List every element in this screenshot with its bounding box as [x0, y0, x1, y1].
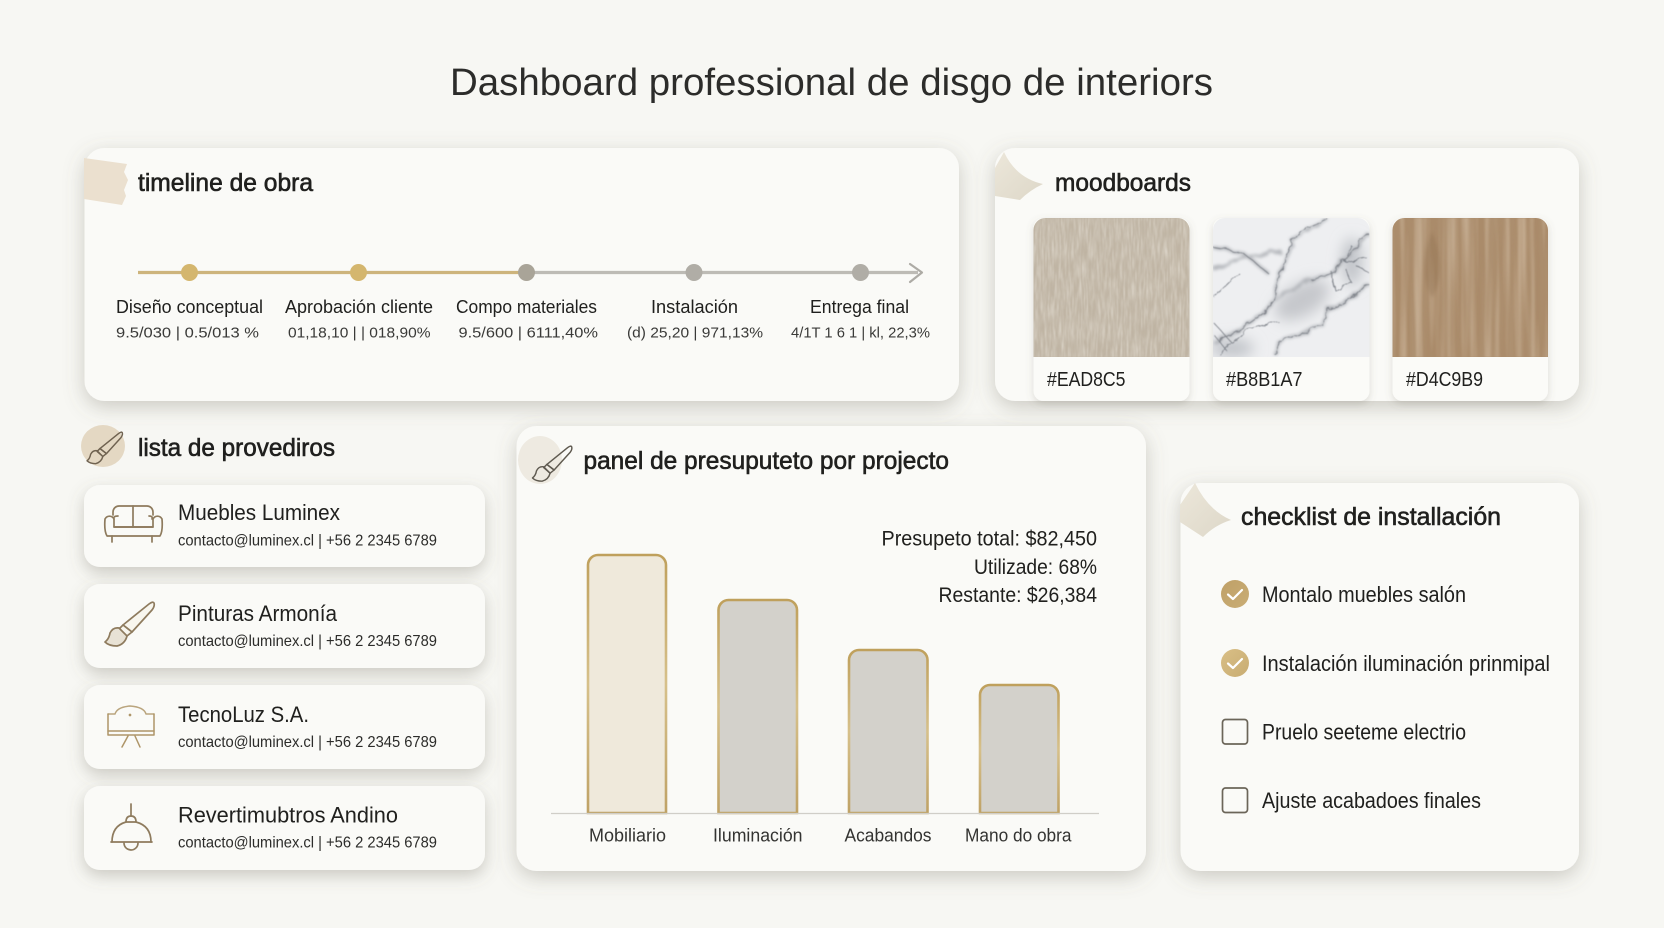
panel: presupuesto por proyecto: [516, 426, 1146, 871]
panel: timeline de obra: [84, 148, 959, 401]
panel: lista de provedores: [81, 425, 485, 870]
supplier name: Revertimubtros Andino: [178, 802, 398, 828]
milestone: Compo materiales: 9.5/600 | 6111,40%: [458, 324, 598, 342]
label: #B8B1A7: [1226, 369, 1302, 391]
milestone: Entrega final: Entrega final: [810, 297, 909, 317]
icon: light fixture: [108, 706, 154, 747]
label: #EAD8C5: [1047, 369, 1126, 391]
heading: checklist de installación: [1241, 503, 1501, 531]
icon: torn paper: [1180, 483, 1231, 537]
card: Pinturas Armonía: [84, 584, 485, 668]
milestone: Diseño conceptual: 9.5/030 | 0.5/013 %: [116, 324, 259, 342]
milestone: Diseño conceptual: [116, 297, 263, 342]
item: done: Instalación iluminación prinmipal: [1262, 651, 1550, 676]
item: done: [1221, 580, 1466, 608]
icon: brush on beige blob: [81, 425, 125, 467]
bar: Iluminación: [718, 600, 797, 813]
arrow head: [910, 264, 922, 282]
icon: sofa: [105, 506, 162, 542]
supplier contact: contacto@luminex.cl | +56 2 2345 6789: [178, 633, 437, 650]
title: Dashboard professional de disgo de interiors: [450, 62, 1213, 104]
icon: paint brush: [105, 602, 154, 646]
supplier name: TecnoLuz S.A.: [178, 702, 309, 727]
milestone: Instalación: Instalación: [651, 297, 738, 317]
supplier contact: contacto@luminex.cl | +56 2 2345 6789: [178, 834, 437, 852]
budget summary: Restante: $26,384: [938, 584, 1097, 607]
swatch: linen: [1034, 218, 1190, 401]
item: pending: Pruelo seeteme electrio: [1262, 720, 1466, 744]
card: Muebles Luminex: [84, 485, 485, 567]
budget summary: [882, 528, 1097, 607]
icon: torn paper: [995, 152, 1043, 200]
heading: lista de provediros: lista de provediros: [138, 434, 335, 462]
timeline track: [138, 264, 922, 282]
heading: timeline de obra: timeline de obra: [138, 169, 313, 197]
supplier contact: contacto@luminex.cl | +56 2 2345 6789: [178, 734, 437, 751]
bar labels: [589, 826, 1072, 846]
bar labels: Mano do obra: [965, 826, 1072, 846]
milestone: Instalación: (d) 25,20 | 971,13%: [627, 324, 763, 342]
supplier name: Muebles Luminex: [178, 500, 340, 525]
milestone: Entrega final: [791, 297, 930, 342]
bar: Mobiliario: [588, 555, 666, 813]
heading: moodboards: moodboards: [1055, 169, 1191, 197]
card: TecnoLuz S.A.: [84, 685, 485, 769]
icon: paper tape: [84, 158, 128, 205]
budget summary: Utilizade: 68%: [974, 556, 1097, 579]
bar: Acabandos: [849, 650, 928, 813]
milestone: Aprobación cliente: [285, 297, 433, 342]
item: pending: Ajuste acabadoes finales: [1262, 788, 1481, 813]
budget summary: Presupeto total: $82,450: [882, 528, 1097, 550]
icon: brush on pale blob: [518, 436, 572, 484]
milestone: Entrega final: 4/1T 1 6 1 | kl, 22,3%: [791, 324, 930, 342]
milestone: Aprobación cliente: 01,18,10 | | 018,90%: [288, 324, 430, 342]
swatch: marble: [1210, 218, 1370, 401]
milestone: Aprobación cliente: Aprobación cliente: [285, 297, 433, 317]
panel: moodboards: [995, 148, 1579, 401]
label: #D4C9B9: [1406, 369, 1483, 391]
bar chart: [551, 555, 1099, 846]
bar labels: Iluminación: [713, 826, 802, 846]
bar labels: Mobiliario: [589, 826, 666, 846]
milestone: Compo materiales: [456, 297, 598, 342]
supplier contact: contacto@luminex.cl | +56 2 2345 6789: [178, 532, 437, 550]
milestone dots: [181, 264, 869, 281]
item: done: Montalo muebles salón: [1262, 582, 1466, 607]
bar labels: Acabandos: [844, 826, 932, 846]
heading: panel de presuputeto por projecto: [584, 447, 949, 475]
swatch: walnut wood: [1392, 218, 1548, 401]
milestone: Diseño conceptual: Diseño conceptual: [116, 297, 263, 317]
icon: pendant lamp: [111, 804, 152, 850]
bar: Mano do obra: [980, 685, 1058, 813]
card: Revertimubtros Andino: [84, 786, 485, 870]
milestone: Compo materiales: Compo materiales: [456, 297, 597, 317]
panel: checklist de installación: [1180, 483, 1579, 871]
milestone: Instalación: [627, 297, 763, 342]
supplier name: Pinturas Armonía: [178, 601, 338, 626]
